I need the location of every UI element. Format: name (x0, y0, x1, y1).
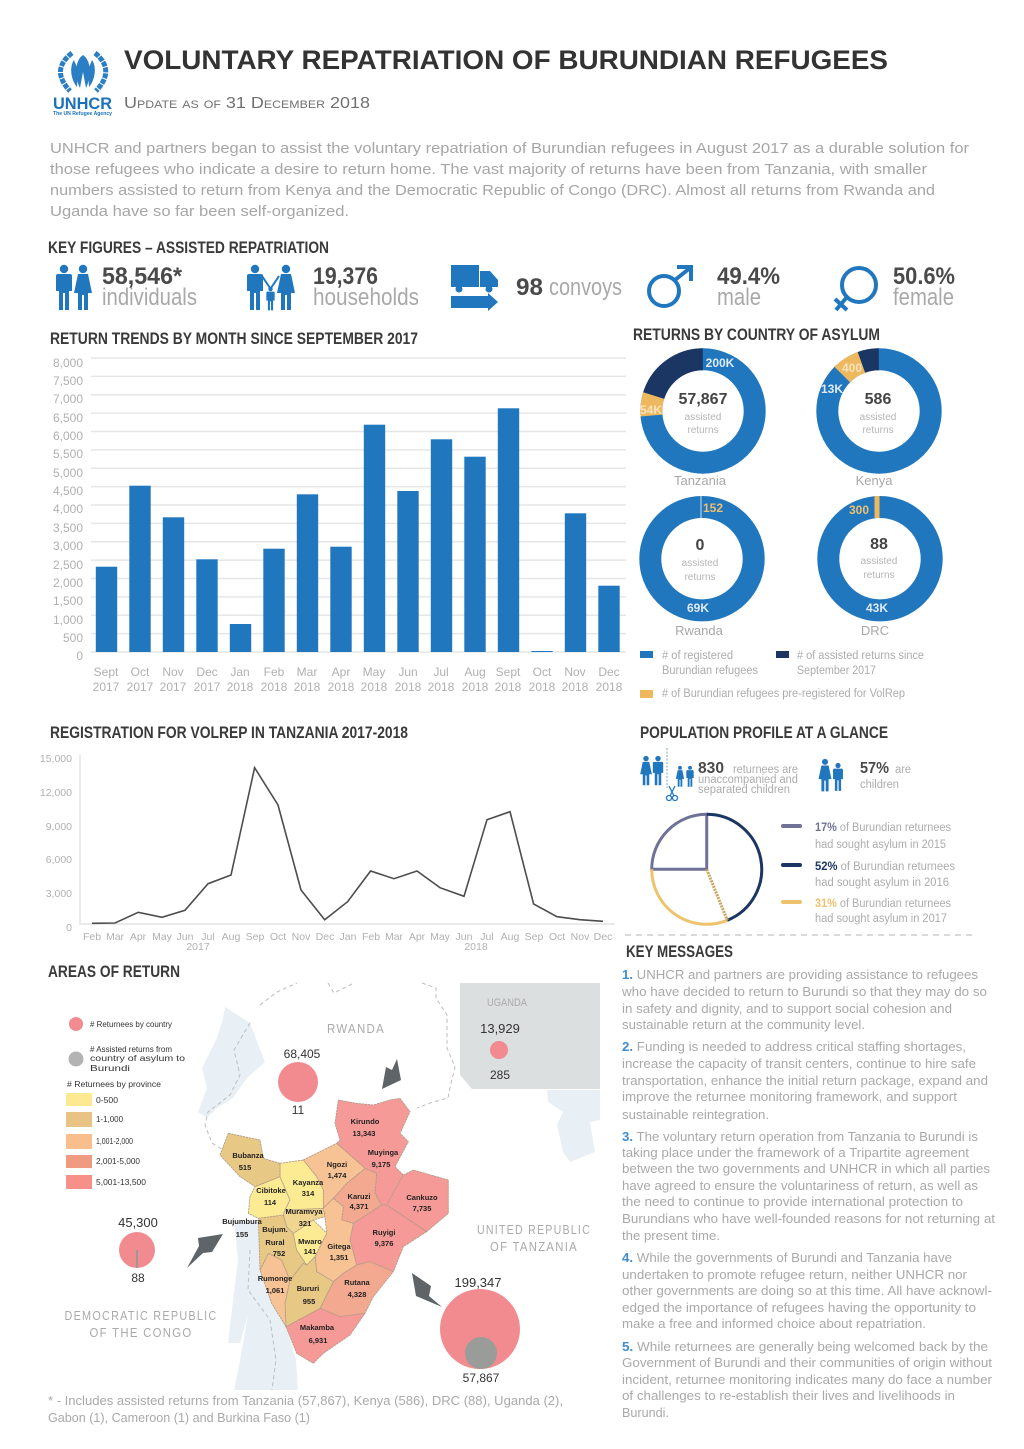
text block: key messages: 5. While returnees are generally being welcomed back by the (622, 1340, 988, 1354)
text block: key messages: in safety and dignity, and to support social cohesion and (622, 1002, 952, 1016)
bar chart: return trends: 2018 (529, 680, 556, 694)
callout: Tanzania: UNITED REPUBLIC (477, 1222, 591, 1237)
map legend: 1,001-2,000 (96, 1137, 133, 1146)
bar chart: return trends: 2018 (395, 680, 422, 694)
province labels: Makamba (300, 1323, 335, 1332)
bar chart: return trends: 2018 (462, 680, 489, 694)
icon: households (247, 265, 295, 310)
province labels: Bujum. (262, 1225, 288, 1234)
bar chart: return trends: 2018 (294, 680, 321, 694)
footnote: * - Includes assisted returns from Tanzania (57,867), Kenya (586), DRC (88), Uganda (2), (48, 1394, 563, 1408)
line chart: registration for volrep: Jul (201, 931, 215, 943)
text block: key messages: who have decided to return to Burundi so that they may do so (621, 985, 987, 999)
province labels: Bubanza (232, 1151, 264, 1160)
donut: Tanzania: 57,867 (679, 391, 728, 408)
legend: year of asylum: had sought asylum in 2016 (815, 877, 949, 889)
bar chart: return trends: 6,000 (53, 429, 83, 443)
province labels: 321 (299, 1219, 311, 1228)
intro paragraph: numbers assisted to return from Kenya and the Democratic Republic of Congo (DRC). Almost all returns from Rwanda and (50, 182, 935, 199)
callout: Tanzania (440, 1222, 591, 1385)
subtitle: Update as of 31 December 2018 (124, 95, 370, 112)
heading: registration: REGISTRATION FOR VOLREP IN TANZANIA 2017-2018 (50, 723, 408, 742)
province labels: Ruyigi (373, 1228, 395, 1237)
figure: male: 49.4% (717, 263, 780, 290)
donut: Rwanda: Rwanda (675, 623, 724, 638)
text block: key messages: improve the returnee monitoring framework, and support (622, 1090, 958, 1104)
line chart: registration for volrep: May (430, 931, 451, 943)
uganda inset: 285 (490, 1068, 510, 1082)
callout: DRC: DEMOCRATIC REPUBLIC (64, 1308, 218, 1323)
donut: Tanzania: 200K (706, 356, 735, 370)
bar chart: return trends: 4,500 (53, 484, 83, 498)
bar chart: return trends: 2018 (361, 680, 388, 694)
donut: Rwanda: 69K (687, 601, 709, 615)
UNHCR logo (53, 53, 112, 117)
figure: convoys: 98 (516, 274, 543, 301)
text block: key messages: taking place under the framework of a Tripartite agreement (622, 1146, 970, 1160)
intro paragraph: Uganda have so far been self-organized. (50, 203, 349, 220)
burundi provinces (220, 1098, 448, 1363)
province labels: Cibitoke (256, 1186, 286, 1195)
line chart: registration for volrep: Oct (549, 931, 565, 943)
donut: DRC: 88 (870, 536, 888, 553)
map legend: # Returnees by country (90, 1020, 172, 1029)
line chart: registration for volrep: Oct (270, 931, 286, 943)
bar chart: return trends: Mar (297, 665, 317, 679)
stat: unaccompanied children: separated children (698, 784, 790, 796)
footnote: Gabon (1), Cameroon (1) and Burkina Faso (1) (48, 1411, 310, 1425)
map legend: 2,001-5,000 (96, 1157, 141, 1166)
intro paragraph: UNHCR and partners began to assist the voluntary repatriation of Burundian refugees in August 2017 as a durable solution for (50, 140, 969, 157)
line chart: registration for volrep: Jun (456, 931, 473, 943)
bar chart: return trends: 4,000 (53, 502, 83, 516)
text block: key messages: transportation, enhance the initial return package, expand and (622, 1074, 988, 1088)
stat: unaccompanied children: 830 (698, 760, 724, 777)
bar chart: return trends: Aug (464, 665, 486, 679)
bar chart: return trends: 1,000 (53, 613, 83, 627)
line chart: registration for volrep: Sep (246, 931, 264, 943)
figure: male: male (717, 284, 761, 311)
text block: key messages: increase the capacity of transit centers, continue to hire safe (622, 1057, 976, 1071)
stat: children: children (860, 779, 899, 791)
heading: key figures: KEY FIGURES – ASSISTED REPATRIATION (48, 238, 329, 257)
callout: DRC: OF THE CONGO (90, 1325, 192, 1340)
text block: key messages: 4. While the governments of Burundi and Tanzania have (622, 1251, 952, 1265)
stat: children: 57% (860, 760, 889, 777)
province labels: 114 (264, 1198, 277, 1207)
icon: individuals (56, 265, 92, 310)
icon: children (819, 759, 843, 791)
text block: key messages: sustainable return at the community level. (622, 1018, 865, 1032)
line chart: registration for volrep: 3,000 (46, 888, 72, 900)
legend: year of asylum (781, 822, 955, 925)
legend: year of asylum: had sought asylum in 2017 (815, 913, 947, 925)
heading: key messages: KEY MESSAGES (626, 942, 733, 961)
bar chart: return trends: 7,500 (53, 374, 83, 388)
text block: key messages: the present time. (622, 1229, 720, 1243)
arrow: from Rwanda (382, 1059, 401, 1089)
province labels (222, 1117, 438, 1345)
bar chart: return trends: 2017 (127, 680, 154, 694)
stat: unaccompanied children: unaccompanied and (698, 774, 798, 786)
uganda inset: UGANDA (487, 997, 528, 1009)
donut: DRC: returns (863, 570, 895, 581)
province labels: Kirundo (351, 1117, 380, 1126)
figure: female: female (893, 284, 954, 311)
text block: key messages: undertaken to promote refugee return, neither UNHCR nor (622, 1268, 967, 1282)
map legend: Burundi (90, 1064, 130, 1073)
province labels: 752 (273, 1249, 285, 1258)
donut: DRC: 43K (866, 601, 888, 615)
bar chart: return trends: 2,500 (53, 558, 83, 572)
province labels: 4,371 (350, 1202, 368, 1211)
legend: year of asylum: 17% of Burundian returnees (815, 822, 951, 834)
text block: key messages: have agreed to ensure the voluntariness of return, as well as (622, 1179, 978, 1193)
arrow: from DRC (187, 1234, 223, 1268)
bar chart: return trends: Oct (533, 665, 552, 679)
line chart: registration for volrep: Apr (130, 931, 147, 943)
line chart: registration for volrep: Mar (106, 931, 125, 943)
map legend: 5,001-13,500 (96, 1178, 147, 1187)
line chart: registration for volrep: Apr (409, 931, 426, 943)
figure: female (893, 263, 955, 311)
text block: key messages: Burundians who have well-founded reasons for not returning at (622, 1212, 996, 1226)
bar chart: return trends: Sept (94, 665, 119, 679)
text block: key messages: other governments are doing so at this time. All have acknowl- (622, 1284, 992, 1298)
province labels: Karuzi (348, 1192, 370, 1201)
map legend (66, 1017, 186, 1189)
bar chart: return trends: 2017 (93, 680, 120, 694)
donut: Kenya: assisted (860, 412, 896, 423)
donut: Tanzania: Tanzania (674, 473, 727, 488)
figure: individuals (102, 263, 197, 311)
line chart: registration for volrep: 6,000 (46, 854, 72, 866)
icon: truck and arrow (451, 265, 498, 311)
bar chart: return trends: 2018 (328, 680, 355, 694)
stat: children (860, 760, 911, 791)
donut: Rwanda: assisted (682, 558, 718, 569)
text block: key messages: 3. The voluntary return operation from Tanzania to Burundi is (622, 1130, 978, 1144)
donut: DRC: assisted (861, 556, 897, 567)
figure: households: households (313, 284, 419, 311)
province labels: Ngozi (327, 1160, 347, 1169)
line chart: registration for volrep: 12,000 (40, 787, 72, 799)
donut: Kenya: 13K (821, 382, 843, 396)
text block: key messages: edged the importance of refugees having the opportunity to (622, 1301, 976, 1315)
line chart: registration for volrep: Jul (480, 931, 494, 943)
icon: separated family (640, 748, 694, 800)
callout: DRC: 88 (131, 1271, 145, 1285)
text block: key messages: Burundi. (622, 1406, 669, 1420)
bar chart: return trends: Nov (564, 665, 586, 679)
callout: Tanzania: 199,347 (454, 1275, 502, 1290)
donut: Rwanda: 152 (703, 501, 723, 515)
province labels: Muyinga (368, 1148, 399, 1157)
bar chart: return trends: 2,000 (53, 576, 83, 590)
icon: female (835, 268, 876, 310)
bar chart: return trends: 3,000 (53, 539, 83, 553)
stat: children: are (895, 764, 911, 776)
heading: areas of return: AREAS OF RETURN (48, 962, 180, 981)
heading: return trends: RETURN TRENDS BY MONTH SINCE SEPTEMBER 2017 (50, 329, 418, 348)
bar chart: return trends: Jun (398, 665, 418, 679)
arrow: from Tanzania (412, 1273, 442, 1307)
bar chart: return trends: 2018 (227, 680, 254, 694)
bar chart: return trends: 5,500 (53, 447, 83, 461)
province labels: Cankuzo (406, 1193, 438, 1202)
line chart: registration for volrep: Feb (362, 931, 380, 943)
map legend: country of asylum to (90, 1054, 186, 1063)
province labels: 314 (302, 1189, 315, 1198)
donut: Rwanda: returns (684, 572, 716, 583)
donut: Rwanda: 0 (696, 537, 705, 554)
text block: key messages: Government of Burundi and their communities of origin without (622, 1356, 993, 1370)
line chart: registration for volrep: 9,000 (46, 821, 72, 833)
legend: year of asylum: 31% of Burundian returnees (815, 898, 951, 910)
callout: DRC: 45,300 (118, 1215, 158, 1230)
callout: Rwanda: RWANDA (327, 1021, 385, 1036)
province labels: 1,474 (328, 1171, 347, 1180)
legend: returns by country: Burundian refugees (662, 665, 758, 677)
heading: population profile: POPULATION PROFILE AT A GLANCE (640, 723, 888, 742)
bar chart: return trends: 5,000 (53, 466, 83, 480)
line chart: registration for volrep: 0 (66, 922, 72, 934)
legend: year of asylum: 52% of Burundian returnees (815, 861, 955, 873)
legend: returns by country (640, 650, 924, 700)
figure: households (313, 263, 419, 311)
line chart: registration for volrep: Dec (594, 931, 612, 943)
text block: key messages: sustainable reintegration. (622, 1108, 769, 1122)
donut: Kenya: 586 (865, 391, 891, 408)
text block: key messages (621, 968, 996, 1420)
bar chart: return trends: 2018 (495, 680, 522, 694)
province labels: Kayanza (293, 1178, 324, 1187)
stat: unaccompanied children: returnees are (733, 764, 798, 776)
intro paragraph: those refugees who indicate a desire to return home. The vast majority of returns have been from Tanzania, with smaller (50, 161, 927, 178)
figure: individuals: 58,546* (102, 263, 183, 290)
donut: Tanzania: assisted (685, 412, 721, 423)
line chart: registration for volrep: Nov (292, 931, 311, 943)
bar chart: return trends: 1,500 (53, 594, 83, 608)
text block: key messages: make a free and informed choice about repatriation. (622, 1317, 926, 1331)
bar chart: return trends: 0 (76, 649, 83, 663)
bar chart: return trends: Dec (598, 665, 620, 679)
line chart: registration for volrep: Aug (222, 931, 240, 943)
callout: Tanzania: 57,867 (463, 1371, 500, 1385)
text block: key messages: of challenges to re-establish their lives and livelihoods in (622, 1389, 955, 1403)
text block: key messages: the need to continue to provide international protection to (622, 1195, 963, 1209)
bar chart: return trends: Jul (433, 665, 449, 679)
province labels: Gitega (327, 1242, 351, 1251)
bar chart: return trends: 6,500 (53, 411, 83, 425)
legend: returns by country: September 2017 (797, 665, 876, 677)
donut: Kenya: Kenya (856, 473, 893, 488)
province labels: Rutana (344, 1278, 371, 1287)
footnote (48, 1394, 563, 1425)
donut: Tanzania (640, 356, 755, 488)
stat: unaccompanied children (698, 760, 798, 796)
bar chart: return trends (53, 356, 626, 694)
bar chart: return trends: Dec (196, 665, 218, 679)
province labels: Muramvya (285, 1207, 323, 1216)
line chart: registration for volrep: May (152, 931, 173, 943)
bar chart: return trends: 2018 (261, 680, 288, 694)
bar chart: return trends: Oct (131, 665, 150, 679)
line chart: registration for volrep: Nov (571, 931, 590, 943)
donut: DRC: DRC (861, 623, 889, 638)
province labels: Bujumbura (222, 1217, 263, 1226)
donut: Kenya: returns (862, 425, 894, 436)
legend: returns by country: # of registered (662, 650, 733, 662)
bar chart: return trends: 3,500 (53, 521, 83, 535)
uganda inset (460, 983, 600, 1089)
pie chart: year of asylum (652, 814, 762, 924)
text block: key messages: 2. Funding is needed to address critical staffing shortages, (622, 1040, 966, 1054)
province labels: 1,351 (330, 1253, 348, 1262)
line chart: registration for volrep: 15,000 (40, 753, 72, 765)
line chart: registration for volrep: Sep (525, 931, 543, 943)
text block: key messages: between the two governments and UNHCR in which all parties (622, 1162, 990, 1176)
text block: key messages: incident, returnee monitoring indicates many do face a number (622, 1373, 992, 1387)
figure: male (717, 263, 780, 311)
callout: Rwanda (278, 1021, 385, 1117)
line chart: registration for volrep: 2017 (186, 941, 210, 953)
legend: returns by country: # of assisted returns since (797, 650, 924, 662)
figure: convoys (516, 274, 622, 301)
donut: DRC: 300 (849, 503, 869, 517)
province labels: 9,376 (375, 1239, 393, 1248)
province labels: Bururi (297, 1284, 319, 1293)
uganda inset: 13,929 (480, 1021, 520, 1036)
province labels: 515 (239, 1163, 251, 1172)
UNHCR logo: UNHCR (53, 95, 112, 113)
bar chart: return trends: 500 (63, 631, 83, 645)
province labels: 1,061 (266, 1286, 284, 1295)
line chart: registration for volrep: Mar (385, 931, 404, 943)
legend: year of asylum: had sought asylum in 2015 (815, 839, 946, 851)
map legend: 1-1,000 (96, 1115, 124, 1124)
figure: female: 50.6% (893, 263, 955, 290)
bar chart: return trends: Nov (162, 665, 184, 679)
province labels: Rural (265, 1238, 285, 1247)
bar chart: return trends: Jan (230, 665, 250, 679)
callout: Rwanda: 68,405 (284, 1047, 321, 1061)
bar chart: return trends: 7,000 (53, 392, 83, 406)
callout: DRC (64, 1215, 218, 1340)
bar chart: return trends: 8,000 (53, 356, 83, 370)
donut: DRC (828, 496, 932, 638)
donut: Kenya: 400 (842, 361, 862, 375)
province labels: 7,735 (413, 1204, 431, 1213)
line chart: registration for volrep: Jun (177, 931, 194, 943)
line chart: registration for volrep: Aug (501, 931, 519, 943)
province labels: Mwaro (298, 1237, 322, 1246)
province labels: 955 (303, 1297, 315, 1306)
province labels: 6,931 (309, 1336, 327, 1345)
figure: convoys: convoys (549, 274, 622, 301)
donut: Tanzania: returns (687, 425, 719, 436)
line chart: registration for volrep: 2018 (464, 941, 488, 953)
legend: returns by country: # of Burundian refugees pre-registered for VolRep (662, 688, 905, 700)
map: areas of return (64, 983, 600, 1390)
line chart: registration for volrep (40, 753, 615, 953)
lakes (198, 1007, 600, 1390)
title: VOLUNTARY REPATRIATION OF BURUNDIAN REFUGEES (124, 45, 888, 75)
bar chart: return trends: 2017 (194, 680, 221, 694)
bar chart: return trends: Sept (496, 665, 521, 679)
map legend: # Returnees by province (67, 1080, 162, 1089)
bar chart: return trends: 2017 (160, 680, 187, 694)
line chart: registration for volrep: Feb (83, 931, 101, 943)
province labels: 9,175 (372, 1160, 390, 1169)
line chart: registration for volrep: Dec (316, 931, 334, 943)
panel: population profile (640, 748, 955, 925)
donut: Kenya (821, 359, 931, 488)
donut: Rwanda (650, 496, 754, 638)
panel: key figures (56, 263, 955, 311)
icon: male (649, 267, 691, 306)
bar chart: return trends: 2018 (562, 680, 589, 694)
bar chart: return trends: May (363, 665, 385, 679)
map legend: # Assisted returns from (90, 1045, 172, 1054)
heading: returns by country: RETURNS BY COUNTRY OF ASYLUM (633, 325, 880, 344)
province labels: 141 (304, 1247, 316, 1256)
bar chart: return trends: 2018 (428, 680, 455, 694)
donut: Tanzania: 54K (640, 403, 662, 417)
bar chart: return trends: Feb (264, 665, 285, 679)
figure: households: 19,376 (313, 263, 378, 290)
text block: key messages: 1. UNHCR and partners are providing assistance to refugees (622, 968, 978, 982)
UNHCR logo: The UN Refugee Agency (53, 111, 112, 117)
province labels: 155 (236, 1230, 248, 1239)
line chart: registration for volrep: Jan (340, 931, 357, 943)
province labels: 4,328 (348, 1290, 366, 1299)
figure: individuals: individuals (102, 284, 197, 311)
intro paragraph (50, 140, 969, 220)
bar chart: return trends: 2018 (596, 680, 623, 694)
province labels: Rumonge (258, 1274, 292, 1283)
callout: Rwanda: 11 (292, 1103, 305, 1117)
map legend: 0-500 (96, 1096, 119, 1105)
province labels: 13,343 (353, 1129, 375, 1138)
callout: Tanzania: OF TANZANIA (490, 1239, 578, 1254)
bar chart: return trends: Apr (332, 665, 350, 679)
